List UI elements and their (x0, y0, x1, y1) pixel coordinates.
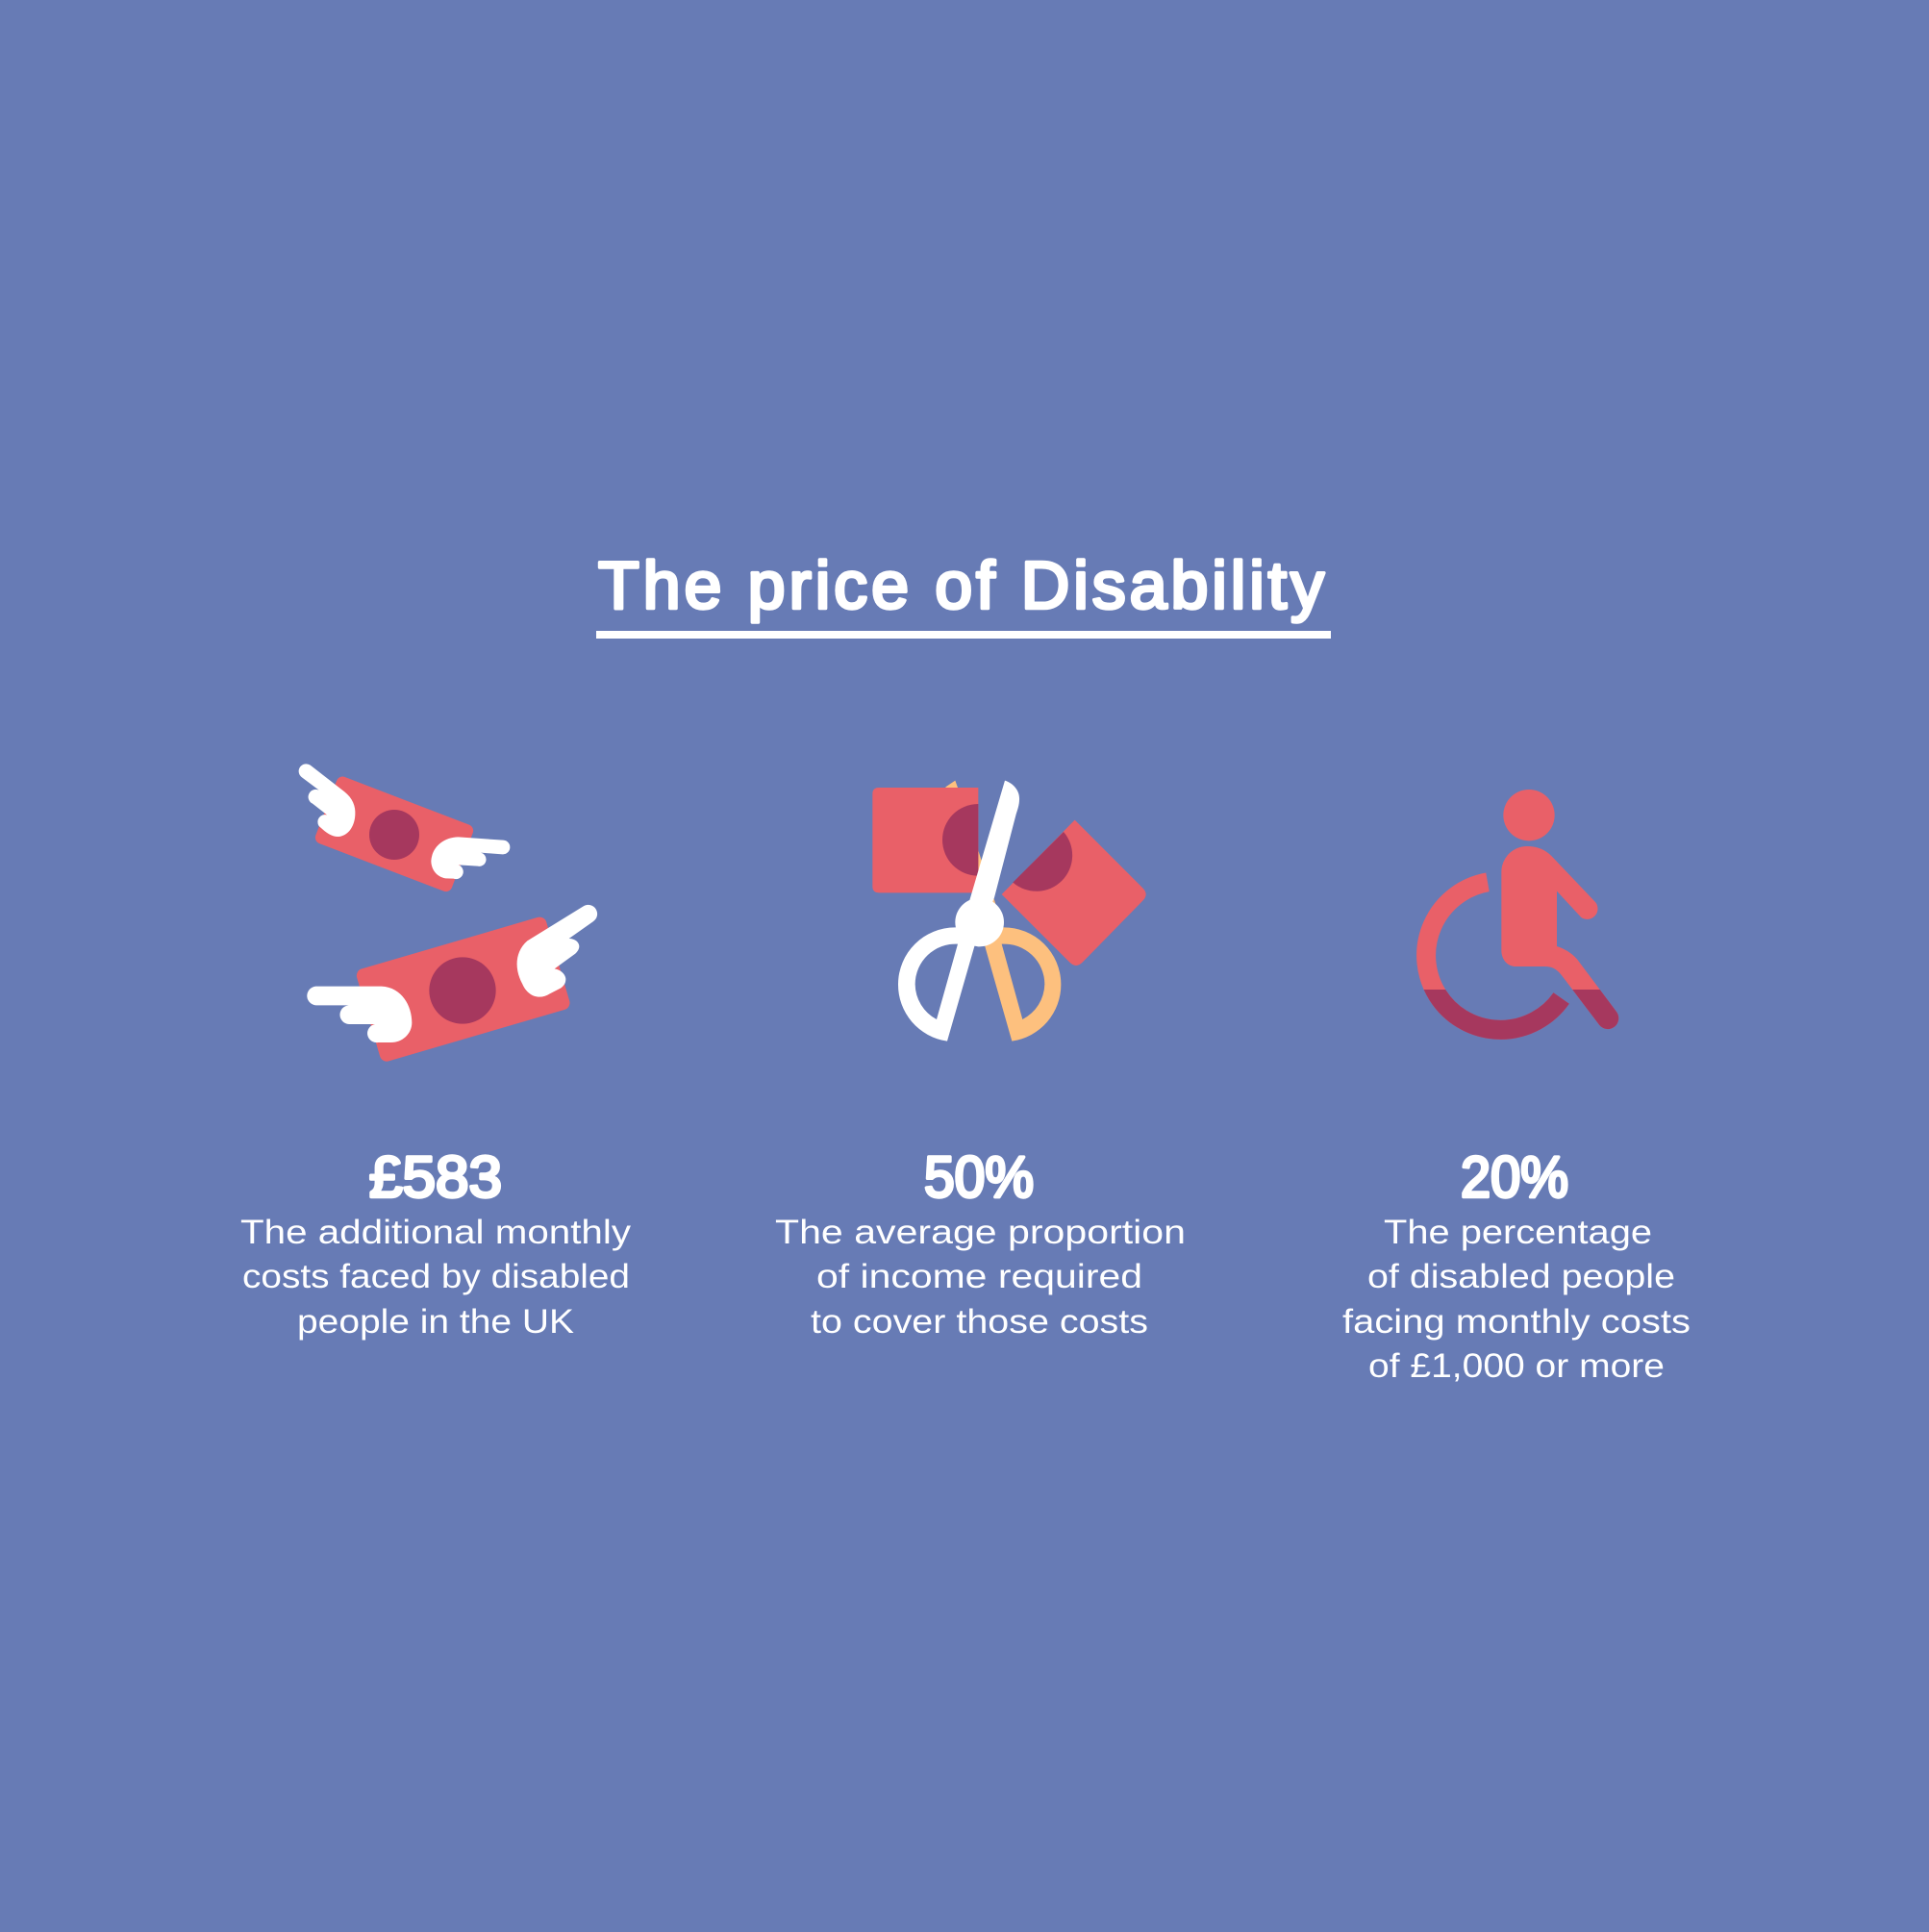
title: The price of Disability (598, 548, 1324, 623)
number: £583 (369, 1144, 502, 1210)
dark lower band (1423, 990, 1619, 1040)
left half of banknote (872, 788, 978, 892)
icon: flying money (299, 764, 597, 1063)
description: to cover those costs (811, 1303, 1148, 1341)
description (1342, 1214, 1691, 1385)
description (775, 1214, 1186, 1341)
description: costs faced by disabled (242, 1258, 630, 1295)
description: The average proportion (775, 1214, 1186, 1251)
right half of banknote (1002, 820, 1146, 966)
description: The additional monthly (240, 1214, 632, 1251)
description: people in the UK (297, 1303, 574, 1341)
description: The percentage (1384, 1214, 1652, 1251)
icon: wheelchair user (1426, 790, 1618, 1030)
stat: £583 (240, 1144, 632, 1341)
stat: 50% (775, 1144, 1186, 1341)
white scissor blade and handle (898, 781, 1019, 1041)
scissor pivot (955, 898, 1004, 946)
description (240, 1214, 632, 1341)
number: 20% (1461, 1144, 1568, 1210)
description: facing monthly costs (1342, 1303, 1691, 1341)
description: of income required (816, 1258, 1142, 1295)
large banknote wings (307, 905, 597, 1042)
description: of disabled people (1367, 1258, 1675, 1295)
head (1503, 790, 1555, 841)
stat: 20% (1342, 1144, 1691, 1385)
orange scissor blade and handle (945, 781, 1061, 1041)
large banknote (355, 916, 571, 1063)
body and wheel (1426, 846, 1618, 1030)
small banknote wings (299, 764, 510, 879)
description: of £1,000 or more (1368, 1347, 1665, 1385)
number: 50% (924, 1144, 1034, 1210)
small banknote (313, 775, 475, 893)
icon: scissors cutting banknote (872, 781, 1146, 1041)
